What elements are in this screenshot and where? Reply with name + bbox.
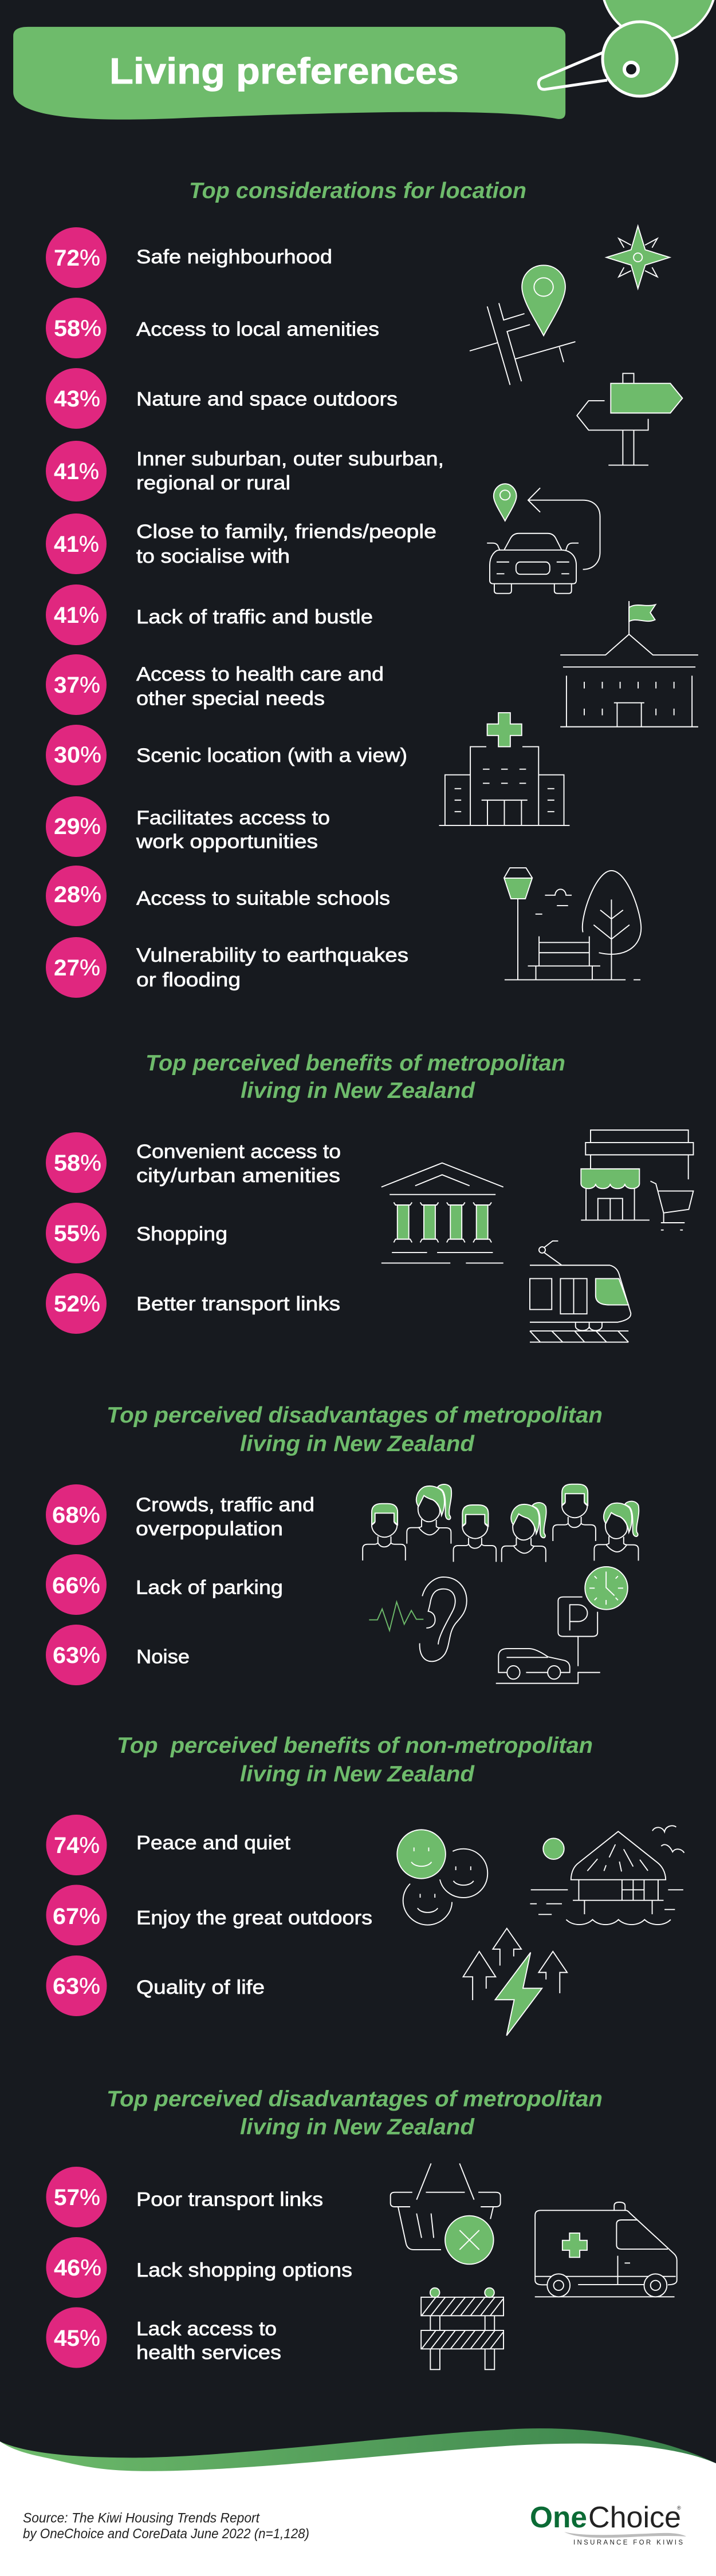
row: 57% poor transport: Poor transport links — [136, 2189, 323, 2211]
section heading: non-metropolitan benefits: living in New Zealand — [240, 1762, 475, 1787]
row: 46% shopping options: Lack shopping options — [136, 2259, 352, 2281]
row: 58% local amenities: Access to local amenities — [136, 318, 379, 340]
row: 41% close to family: Close to family, friends/people — [136, 521, 436, 543]
row: 41% lack of traffic: Lack of traffic and bustle — [136, 606, 373, 628]
row: 28% schools: Access to suitable schools — [136, 887, 390, 909]
row: 74% peace: Peace and quiet — [136, 1832, 291, 1854]
row: 58% local amenities: 58% — [54, 316, 101, 341]
row: 41% lack of traffic: 41% — [54, 603, 99, 628]
section heading: metropolitan disadvantages — [107, 1403, 603, 1456]
icon: crowd of people — [363, 1484, 639, 1562]
icon: car with pin and return arrow — [487, 484, 600, 594]
row: 74% peace — [46, 1815, 291, 1875]
section heading: non-metropolitan benefits: Top perceived benefits of non-metropolitan — [117, 1733, 593, 1758]
row: 63% quality of life: 63% — [53, 1974, 100, 1999]
section heading: second disadvantages: living in New Zealand — [240, 2115, 475, 2140]
row: 41% close to family: to socialise with — [136, 546, 290, 567]
section heading: metropolitan benefits: living in New Zealand — [241, 1078, 475, 1103]
row: 58% city amenities: city/urban amenities — [136, 1165, 340, 1187]
logo: OneChoice: One — [530, 2501, 587, 2534]
row: 67% outdoors: 67% — [53, 1904, 100, 1929]
section heading: non-metropolitan benefits — [117, 1733, 593, 1787]
row: 55% shopping: Shopping — [136, 1223, 227, 1245]
row: 58% city amenities: 58% — [54, 1151, 101, 1176]
row: 37% health care: other special needs — [136, 688, 325, 710]
row: 43% nature — [46, 368, 398, 429]
row: 63% noise: 63% — [53, 1643, 100, 1668]
row: 66% parking: 66% — [52, 1573, 100, 1598]
icon: park with lamp, bench and tree — [504, 868, 641, 980]
icon: signpost — [577, 373, 682, 465]
icon: road barrier — [421, 2288, 503, 2369]
section heading: metropolitan disadvantages: living in New Zealand — [240, 1432, 475, 1456]
row: 29% work: Facilitates access to — [136, 807, 330, 829]
row: 27% earthquakes: 27% — [54, 955, 100, 981]
row: 29% work — [46, 796, 330, 857]
row: 45% health services — [46, 2307, 281, 2368]
row: 57% poor transport — [46, 2167, 323, 2227]
icon: three smiley faces — [397, 1830, 487, 1925]
section heading: top considerations: Top considerations for location — [189, 179, 526, 203]
row: 37% health care: 37% — [54, 673, 100, 698]
row: 66% parking — [46, 1554, 283, 1615]
source note: by OneChoice and CoreData June 2022 (n=1,128) — [23, 2526, 309, 2542]
icon: compass star — [607, 226, 670, 289]
icon: ambulance — [535, 2202, 677, 2297]
row: 58% city amenities — [46, 1132, 341, 1193]
icon: school building with flag — [560, 601, 698, 727]
icon: beach hut on water — [530, 1826, 684, 1925]
icon: train — [530, 1241, 631, 1342]
row: 67% outdoors: Enjoy the great outdoors — [136, 1907, 372, 1929]
footer wave — [0, 2428, 716, 2576]
row: 45% health services: health services — [136, 2342, 281, 2364]
icon: shopping basket with cross — [391, 2163, 501, 2264]
logo: OneChoice — [530, 2501, 686, 2546]
section heading: metropolitan benefits — [145, 1051, 565, 1103]
row: 74% peace: 74% — [54, 1833, 100, 1858]
row: 63% noise: Noise — [136, 1646, 190, 1668]
row: 57% poor transport: 57% — [54, 2185, 100, 2210]
icon: lightning bolt and up arrows — [463, 1929, 567, 2036]
row: 27% earthquakes — [46, 937, 408, 998]
row: 30% scenic: Scenic location (with a view) — [136, 745, 407, 767]
source note — [23, 2511, 309, 2542]
logo: OneChoice: Choice — [588, 2501, 681, 2534]
row: 58% local amenities — [46, 298, 379, 358]
logo: OneChoice: INSURANCE FOR KIWIS — [573, 2539, 683, 2546]
row: 46% shopping options: 46% — [54, 2255, 101, 2281]
section heading: second disadvantages: Top perceived disadvantages of metropolitan — [107, 2087, 603, 2111]
row: 28% schools: 28% — [54, 882, 101, 907]
row: 72% safe neighbourhood: 72% — [54, 246, 100, 271]
row: 63% quality of life — [46, 1955, 265, 2016]
row: 55% shopping — [46, 1203, 227, 1263]
icon: map pin top right — [538, 0, 716, 96]
row: 28% schools — [46, 866, 390, 926]
row: 41% close to family — [46, 513, 436, 574]
row: 72% safe neighbourhood: Safe neighbourhood — [136, 246, 332, 268]
row: 66% parking: Lack of parking — [136, 1577, 283, 1598]
row: 52% transport: 52% — [54, 1291, 100, 1317]
row: 41% inner suburban: regional or rural — [136, 472, 290, 494]
row: 27% earthquakes: or flooding — [136, 969, 241, 991]
row: 37% health care: Access to health care and — [136, 663, 384, 685]
row: 29% work: 29% — [54, 814, 101, 839]
row: 63% noise — [46, 1625, 190, 1685]
row: 41% inner suburban: Inner suburban, outer suburban, — [136, 448, 444, 470]
row: 30% scenic — [46, 725, 407, 785]
source note: Source: The Kiwi Housing Trends Report — [23, 2511, 260, 2526]
icon: map pin on streets — [470, 265, 575, 385]
row: 41% inner suburban — [46, 441, 444, 501]
row: 27% earthquakes: Vulnerability to earthquakes — [136, 945, 408, 966]
row: 29% work: work opportunities — [136, 831, 318, 853]
row: 68% crowds: Crowds, traffic and — [136, 1494, 314, 1516]
icon: hospital — [439, 713, 570, 825]
section heading: second disadvantages — [107, 2087, 603, 2140]
section heading: metropolitan benefits: Top perceived benefits of metropolitan — [145, 1051, 565, 1076]
row: 63% quality of life: Quality of life — [136, 1977, 265, 1998]
row: 43% nature: 43% — [54, 386, 100, 412]
row: 68% crowds: 68% — [52, 1503, 100, 1528]
row: 46% shopping options — [46, 2237, 352, 2298]
logo: OneChoice: ® — [677, 2505, 681, 2511]
row: 43% nature: Nature and space outdoors — [136, 388, 398, 410]
title banner: Living preferences — [109, 50, 459, 92]
row: 45% health services: 45% — [54, 2326, 100, 2351]
row: 52% transport: Better transport links — [136, 1293, 340, 1315]
row: 41% close to family: 41% — [54, 532, 99, 557]
row: 37% health care — [46, 654, 384, 715]
icon: civic building with columns — [381, 1163, 503, 1263]
title banner — [13, 27, 565, 120]
row: 45% health services: Lack access to — [136, 2318, 277, 2340]
row: 55% shopping: 55% — [54, 1221, 100, 1246]
row: 58% city amenities: Convenient access to — [136, 1141, 341, 1163]
icon: shop with trolley — [581, 1130, 693, 1230]
section heading: metropolitan disadvantages: Top perceived disadvantages of metropolitan — [107, 1403, 603, 1428]
row: 41% lack of traffic — [46, 584, 373, 645]
row: 41% inner suburban: 41% — [54, 459, 99, 484]
icon: ear with sound wave — [369, 1577, 467, 1661]
row: 67% outdoors — [46, 1884, 372, 1945]
row: 52% transport — [46, 1273, 340, 1334]
row: 72% safe neighbourhood — [46, 227, 332, 288]
row: 30% scenic: 30% — [54, 742, 101, 768]
icon: parking sign, clock and car — [496, 1567, 628, 1684]
row: 68% crowds — [46, 1484, 314, 1545]
row: 68% crowds: overpopulation — [136, 1518, 283, 1540]
